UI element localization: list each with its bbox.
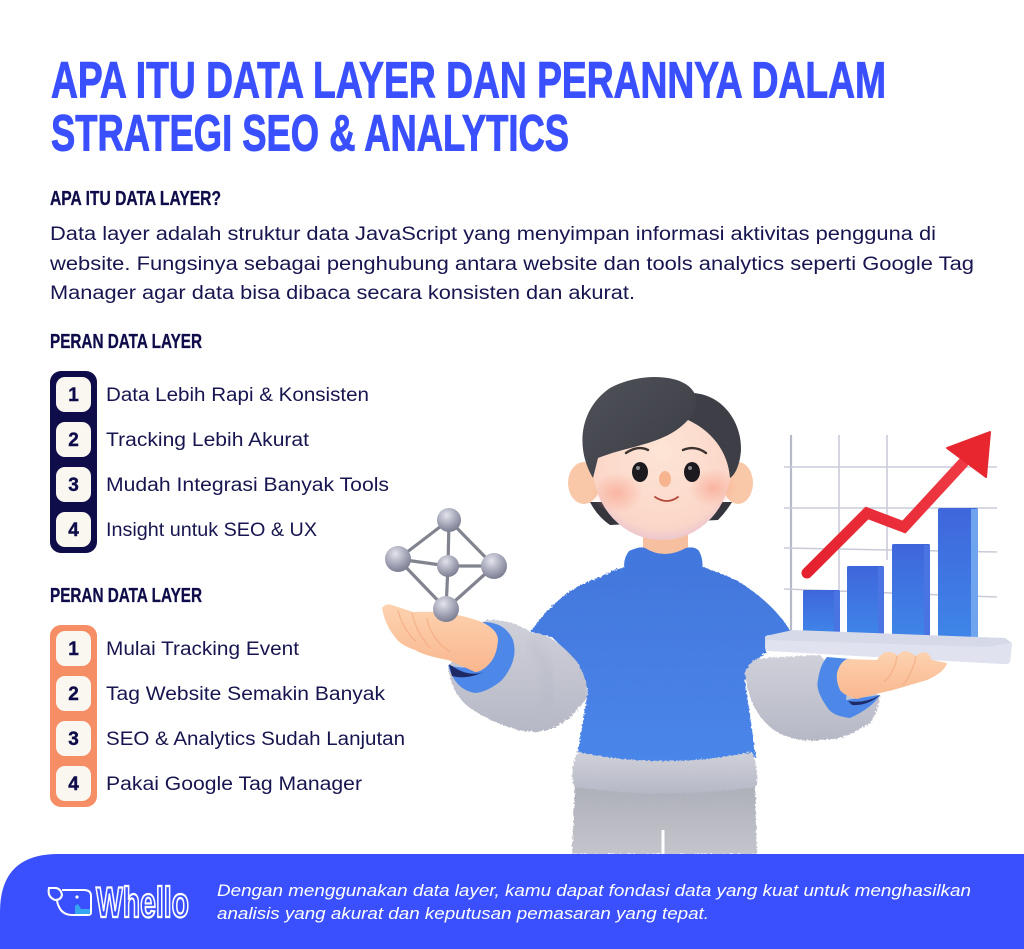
title [51, 52, 886, 162]
panel: numbered list orange: 1 [68, 639, 79, 660]
left sleeve [448, 620, 587, 732]
list labels: second list [106, 639, 405, 795]
ears [568, 462, 753, 504]
nose and smile [655, 471, 678, 501]
footer text: analisis yang akurat dan keputusan pemasaran yang tepat. [217, 905, 709, 923]
panel: numbered list navy: 1 [68, 385, 79, 406]
sleeve fold [530, 640, 549, 710]
neck [643, 528, 688, 556]
illustration: character with molecule and chart [382, 377, 1012, 854]
panel: numbered list navy: 3 [68, 475, 79, 496]
list labels: first list: Tracking Lebih Akurat [106, 430, 310, 451]
list labels: first list: Insight untuk SEO & UX [106, 520, 317, 541]
logo: wordmark: Whello [96, 879, 189, 927]
logo: whale icon [49, 888, 91, 915]
cheeks [591, 469, 737, 513]
title: STRATEGI SEO & ANALYTICS [51, 104, 569, 162]
platform [765, 630, 1012, 664]
text block: definition: website. Fungsinya sebagai penghubung antara website dan tools analytics seperti Google Tag [49, 254, 974, 275]
bars [803, 508, 978, 642]
heading: second peran data layer: PERAN DATA LAYER [50, 585, 202, 607]
waistband [572, 752, 757, 794]
cuff shadow [449, 664, 484, 677]
face [593, 394, 731, 540]
panel: numbered list orange [50, 625, 97, 807]
panel: numbered list orange: 2 [68, 684, 79, 705]
list labels: second list: Pakai Google Tag Manager [106, 774, 363, 795]
hair [582, 377, 741, 478]
heading: peran data layer: PERAN DATA LAYER [50, 331, 202, 353]
panel: numbered list orange: 3 [68, 729, 79, 750]
footer band [0, 854, 1024, 949]
text block: definition: Manager agar data bisa dibaca secara konsisten dan akurat. [50, 283, 635, 304]
list labels: first list: Mudah Integrasi Banyak Tools [106, 475, 389, 496]
left cuff [448, 622, 515, 693]
back hair [590, 502, 732, 525]
molecule [385, 508, 507, 622]
panel: numbered list navy: 4 [68, 520, 79, 541]
panel: numbered list navy: 2 [68, 430, 79, 451]
sweater body and arms [530, 566, 791, 764]
right cuff [817, 657, 880, 718]
left hand [382, 604, 498, 672]
heading: apa itu data layer: APA ITU DATA LAYER? [50, 188, 221, 210]
footer text [217, 882, 971, 923]
arrow [807, 432, 990, 573]
right hand [837, 651, 947, 699]
eyes and brows [626, 448, 706, 482]
list labels: first list [106, 385, 389, 541]
right sleeve [745, 655, 880, 741]
list labels: second list: Mulai Tracking Event [106, 639, 300, 660]
footer text: Dengan menggunakan data layer, kamu dapat fondasi data yang kuat untuk menghasilkan [217, 882, 971, 900]
list labels: first list: Data Lebih Rapi & Konsisten [106, 385, 369, 406]
text block: definition [49, 224, 974, 304]
panel: numbered list orange: 4 [68, 774, 79, 795]
list labels: second list: Tag Website Semakin Banyak [106, 684, 386, 705]
panel: numbered list navy [50, 371, 97, 553]
collar [624, 547, 703, 578]
legs [572, 785, 757, 854]
chart grid [784, 435, 997, 632]
cuff shadow [848, 695, 880, 705]
text block: definition: Data layer adalah struktur data JavaScript yang menyimpan informasi aktivitas pengguna di [50, 224, 936, 245]
list labels: second list: SEO & Analytics Sudah Lanjutan [106, 729, 405, 750]
